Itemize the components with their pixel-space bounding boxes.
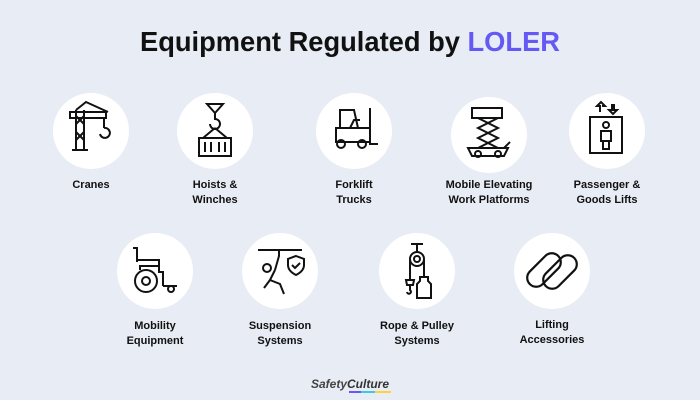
item: mewp: Mobile Elevating [446, 179, 532, 191]
item: mewp: Work Platforms [448, 194, 530, 206]
icon: pulley [406, 244, 431, 298]
icon: chain link [523, 249, 581, 293]
item: hoists: Winches [192, 194, 238, 206]
item: suspension [242, 233, 318, 347]
item: lifting accessories [514, 233, 590, 346]
item: suspension: Systems [257, 335, 303, 347]
item: cranes: Cranes [72, 179, 110, 191]
item: lifting accessories: Accessories [520, 334, 584, 346]
item: pulley [379, 233, 455, 347]
item: hoists: Hoists & [193, 179, 237, 191]
logo: SafetyCulture [311, 377, 389, 391]
icon: scissor lift [468, 108, 510, 157]
item: lifting accessories: Lifting [535, 319, 569, 331]
icon: forklift [336, 108, 378, 148]
item: lifts: Goods Lifts [576, 194, 638, 206]
item: forklift [316, 93, 392, 206]
title: Equipment Regulated by LOLER [140, 26, 560, 57]
icon: crane [70, 102, 110, 150]
icon: harness [258, 250, 304, 294]
item: lifts [569, 93, 645, 206]
item: mewp [446, 97, 532, 206]
item: lifts: Passenger & [574, 179, 640, 191]
item: mobility: Mobility [134, 320, 177, 332]
item: pulley: Systems [394, 335, 440, 347]
icon: hoist [199, 104, 231, 156]
item: forklift: Forklift [335, 179, 373, 191]
icon: elevator [590, 102, 622, 153]
item: mobility [117, 233, 193, 347]
item: pulley: Rope & Pulley [380, 320, 455, 332]
item: mobility: Equipment [127, 335, 184, 347]
item: cranes [53, 93, 129, 191]
item: forklift: Trucks [336, 194, 372, 206]
icon: wheelchair [133, 248, 177, 292]
item: suspension: Suspension [249, 320, 311, 332]
item: hoists [177, 93, 253, 206]
